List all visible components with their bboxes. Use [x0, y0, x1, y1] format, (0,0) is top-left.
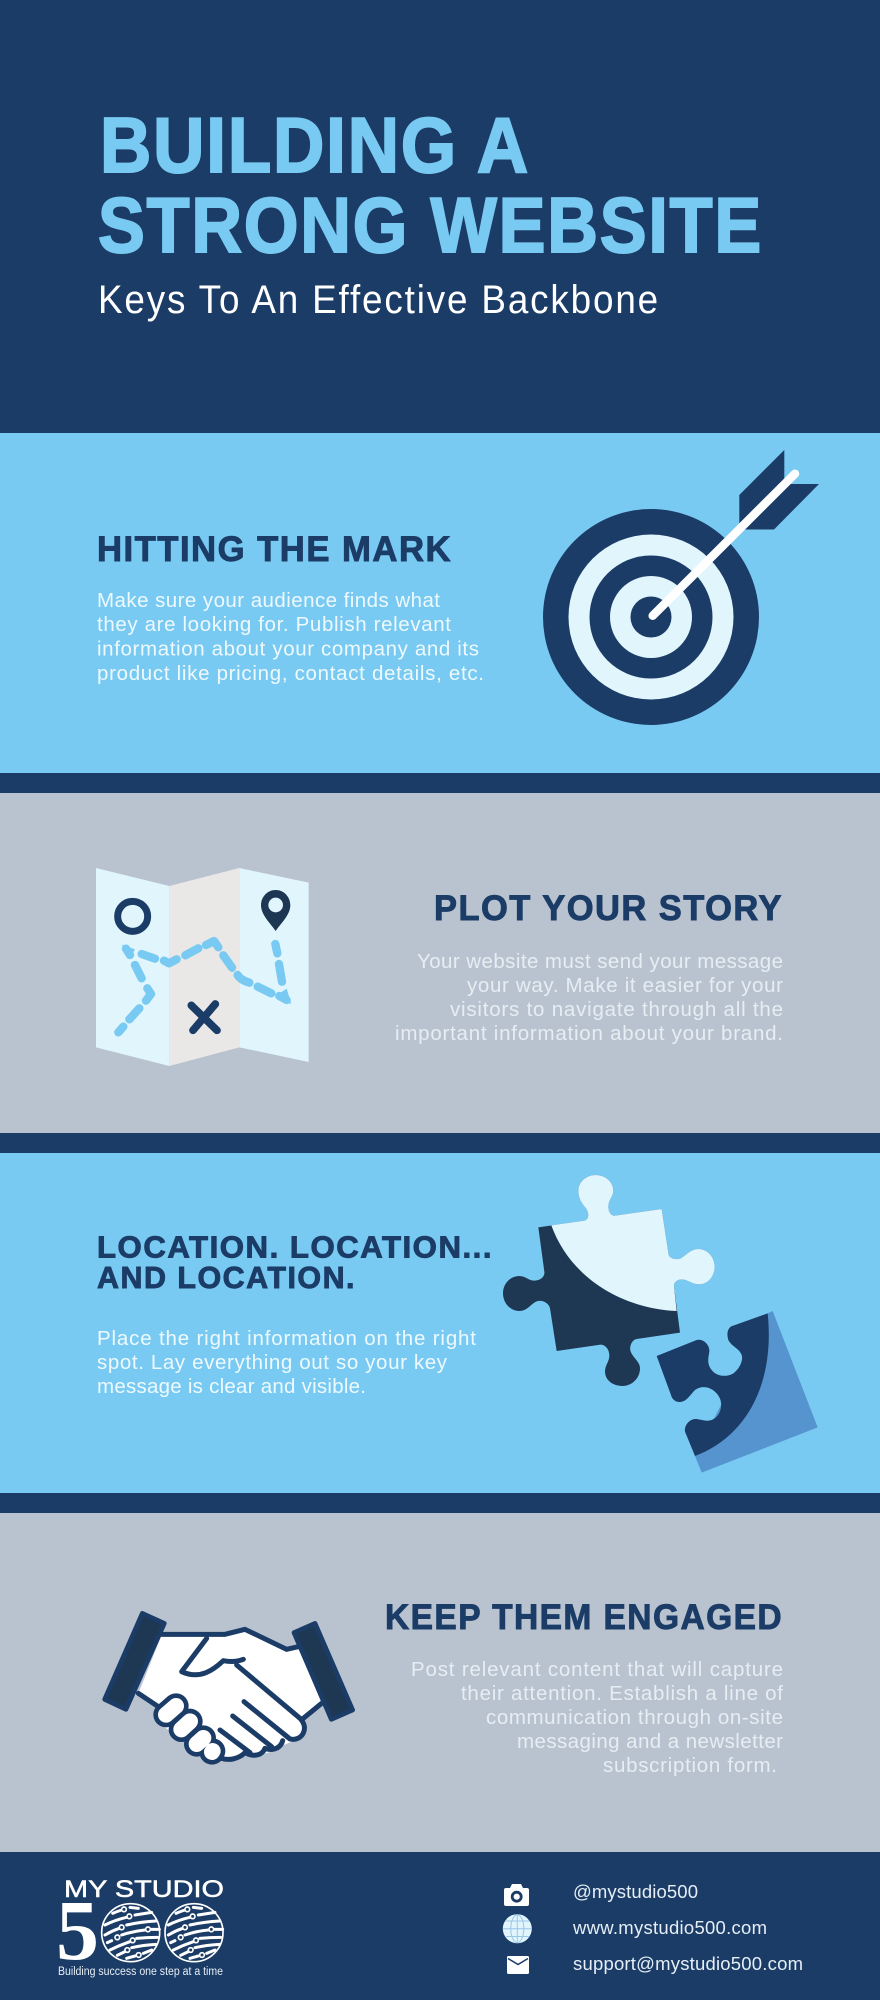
body text: information about your company and its: [97, 638, 479, 660]
title: STRONG WEBSITE: [98, 181, 763, 269]
contact: website: [503, 1914, 767, 1943]
body text: they are looking for. Publish relevant: [97, 613, 451, 636]
header panel: [0, 0, 880, 433]
body text: subscription form.: [603, 1754, 777, 1777]
body text: [97, 1327, 476, 1398]
body text: message is clear and visible.: [97, 1375, 366, 1398]
panel: plot your story: [0, 793, 880, 1133]
body text: [97, 589, 484, 685]
panel: hitting the mark: [0, 433, 880, 773]
body text: important information about your brand.: [395, 1022, 783, 1045]
icon: puzzle pieces: [503, 1175, 818, 1473]
title: [98, 101, 763, 269]
logo circuit zeros: [102, 1904, 223, 1962]
panel: keep them engaged: [0, 1513, 880, 1852]
body text: visitors to navigate through all the: [450, 998, 783, 1021]
body text: Place the right information on the right: [97, 1327, 476, 1350]
icon: target with arrow: [543, 450, 819, 725]
body text: spot. Lay everything out so your key: [97, 1351, 448, 1374]
body text: your way. Make it easier for your: [467, 974, 783, 997]
heading: [97, 1230, 493, 1295]
contact: email: support@mystudio500.com: [573, 1953, 803, 1974]
icon: globe: [503, 1914, 532, 1943]
body text: Make sure your audience finds what: [97, 589, 440, 612]
contact: website: www.mystudio500.com: [572, 1917, 767, 1938]
icon: camera: [504, 1884, 529, 1906]
icon: folded map: [96, 868, 309, 1066]
heading: KEEP THEM ENGAGED: [385, 1597, 783, 1637]
contact: instagram: [504, 1881, 698, 1906]
heading: HITTING THE MARK: [97, 529, 452, 569]
panel: location: [0, 1153, 880, 1493]
body text: communication through on-site: [486, 1706, 783, 1729]
body text: Post relevant content that will capture: [411, 1658, 783, 1681]
body text: messaging and a newsletter: [517, 1730, 783, 1753]
logo: my studio 500: [56, 1876, 224, 1978]
footer panel: [0, 1852, 880, 2000]
body text: [395, 950, 783, 1045]
body text: product like pricing, contact details, etc.: [97, 662, 484, 685]
body text: Your website must send your message: [417, 950, 783, 973]
icon: handshake: [105, 1613, 353, 1760]
subtitle: Keys To An Effective Backbone: [98, 278, 660, 322]
heading: AND LOCATION.: [97, 1260, 356, 1295]
logo tagline: Building success one step at a time: [58, 1966, 223, 1978]
logo wordmark: MY STUDIO: [64, 1876, 224, 1903]
title: BUILDING A: [100, 101, 530, 189]
logo numeral: 5: [56, 1882, 99, 1978]
contact: instagram: @mystudio500: [573, 1881, 698, 1902]
body text: [411, 1658, 783, 1777]
body text: their attention. Establish a line of: [461, 1682, 783, 1705]
icon: envelope: [507, 1956, 529, 1974]
heading: LOCATION. LOCATION...: [97, 1230, 493, 1264]
heading: PLOT YOUR STORY: [434, 888, 783, 928]
